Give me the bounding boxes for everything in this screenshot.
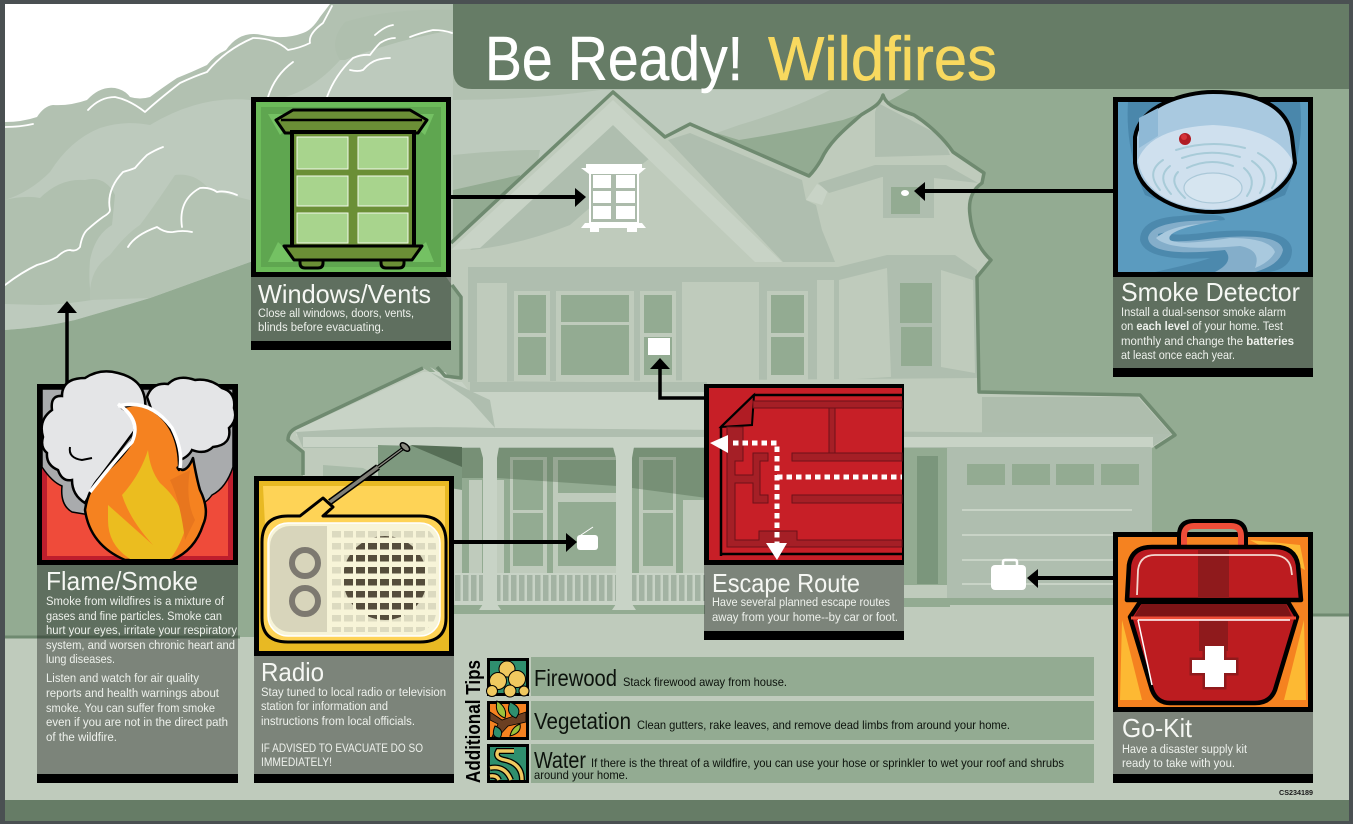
title banner [453,4,1349,94]
title accent: Wildfires [768,25,997,94]
house illustration [288,92,1175,614]
panel: flame/smoke [37,371,238,783]
white cloud left [42,371,145,503]
radio body [262,498,446,642]
text: windows/vents [258,306,414,334]
text: flame/smoke: smoke. You can suffer from smoke [46,701,215,715]
garage [947,448,1152,598]
porch roof [430,367,707,430]
white cloud right [147,378,235,462]
antenna [330,467,378,502]
bottom band [5,800,1349,821]
flame core [108,450,185,559]
text: radio: IMMEDIATELY! [261,755,332,769]
gable trim [451,100,782,262]
porch windows [513,460,673,566]
text: smoke detector [1121,305,1294,362]
white window marker [581,164,646,232]
text: go-kit: ready to take with you. [1122,756,1235,770]
arrow: windows to house [451,188,586,207]
porch interior [378,445,462,490]
text: flame/smoke: lung diseases. [46,652,115,666]
caption: windows/vents [251,277,451,341]
text: smoke detector: monthly and change the batteries [1121,334,1294,348]
text: flame/smoke: of the wildfire. [46,730,117,744]
additional tips heading: Additional Tips [463,660,485,783]
text: escape route: Have several planned escape routes [712,595,890,609]
heading: radio: Radio [261,657,324,687]
white radio marker [577,527,598,550]
tip: vegetation: Clean gutters, rake leaves, and remove dead limbs from around your home. [637,718,1010,732]
tip: vegetation [487,701,1094,740]
background hillside [5,60,1349,640]
arrow: smoke detector to house [914,182,1113,201]
text: radio: station for information and [261,699,388,713]
tip: firewood: Firewood [534,665,617,691]
panel: radio [254,441,454,783]
icon: window [251,97,451,277]
icon: vegetation [487,701,529,740]
text: flame/smoke: system, and worsen chronic heart and [46,638,235,652]
text: windows/vents: Close all windows, doors, vents, [258,306,414,320]
tower window [891,187,920,214]
text: flame/smoke: gases and fine particles. Smoke can [46,609,222,623]
upper storey band [468,255,977,382]
icon: first aid kit [1113,522,1313,712]
tip: water [487,744,1094,783]
icon: water hose [487,744,529,783]
upper windows [518,283,932,375]
caption: escape route [704,565,904,631]
caption: flame/smoke [37,565,238,774]
house body [288,92,1175,604]
ground edge [5,615,1349,637]
tip: water: around your home. [534,768,628,782]
text: flame/smoke: Smoke from wildfires is a mixture of [46,594,225,608]
white alarm marker [901,190,909,196]
tip: vegetation: Vegetation [534,708,631,734]
heading: go-kit: Go-Kit [1122,713,1193,743]
garage roof [982,397,1172,438]
heading: windows/vents: Windows/Vents [258,279,431,309]
icon: firewood [486,658,529,697]
smoke swirl [1140,215,1292,272]
text: flame/smoke: Listen and watch for air quality [46,671,200,685]
kit lid [1127,547,1301,600]
text: go-kit: Have a disaster supply kit [1122,742,1247,756]
icon: radio [254,441,454,656]
arrow: escape route to door [650,358,704,398]
porch beam [296,427,1172,448]
arrow: go-kit to garage [1027,569,1113,588]
caption: go-kit [1113,712,1313,774]
gable shade [470,125,650,250]
text: radio: IF ADVISED TO EVACUATE DO SO [261,741,423,755]
text: escape route [712,595,898,624]
icon: floor plan [704,384,904,565]
tower dome [875,103,950,157]
smoke clouds [5,4,1000,330]
panel: go-kit [1113,522,1313,783]
text: smoke detector: at least once each year. [1121,348,1235,362]
text: radio: Stay tuned to local radio or television [261,685,446,699]
tip: firewood [486,657,1094,697]
white kit marker [991,560,1026,590]
tip: water: Water [534,747,586,773]
arrow: radio to house [454,533,577,552]
heading: flame/smoke: Flame/Smoke [46,566,198,596]
flame [85,405,206,560]
ground [5,604,1349,800]
text: smoke detector: Install a dual-sensor smoke alarm [1121,305,1286,319]
grey smoke [42,389,233,515]
text: go-kit [1122,742,1247,770]
wing shade [904,448,947,585]
text: radio: instructions from local officials. [261,714,415,728]
icon: smoke detector [1113,92,1313,277]
text: radio [261,685,446,769]
text: flame/smoke: even if you are not in the direct path [46,715,228,729]
text: windows/vents: blinds before evacuating. [258,320,384,334]
text: smoke detector: on each level of your home. Test [1121,319,1283,333]
upper roof [668,133,835,262]
arrow: flame up to sky [57,301,77,386]
route arrows [710,435,902,560]
porch columns [479,447,636,610]
porch railing [455,573,705,606]
tip: firewood: Stack firewood away from house. [623,675,787,689]
white cross [1192,646,1236,687]
heading: escape route: Escape Route [712,568,860,598]
document code: CS234189 [1279,788,1313,797]
title: Be Ready! [485,25,743,94]
house outline [288,92,1175,475]
caption: smoke detector [1113,277,1313,368]
text: flame/smoke [46,594,238,744]
kit base [1130,602,1297,703]
text: flame/smoke: reports and health warnings about [46,686,220,700]
icon: flame and smoke [37,371,238,565]
text: escape route: away from your home--by car or foot. [712,610,898,624]
panel: escape route [704,384,904,640]
heading: smoke detector: Smoke Detector [1121,277,1300,307]
tip: water: If there is the threat of a wildfire, you can use your hose or sprinkler to wet your roof and shrubs [591,756,1064,770]
handle [1180,522,1245,548]
white exit marker [648,338,670,355]
detector body [1135,92,1295,212]
background sky [5,4,330,122]
panel: smoke detector [1113,92,1313,377]
caption: radio [254,656,454,774]
panel: windows/vents [251,97,451,350]
porch window frames [510,457,707,573]
text: flame/smoke: hurt your eyes, irritate your respiratory [46,623,238,637]
